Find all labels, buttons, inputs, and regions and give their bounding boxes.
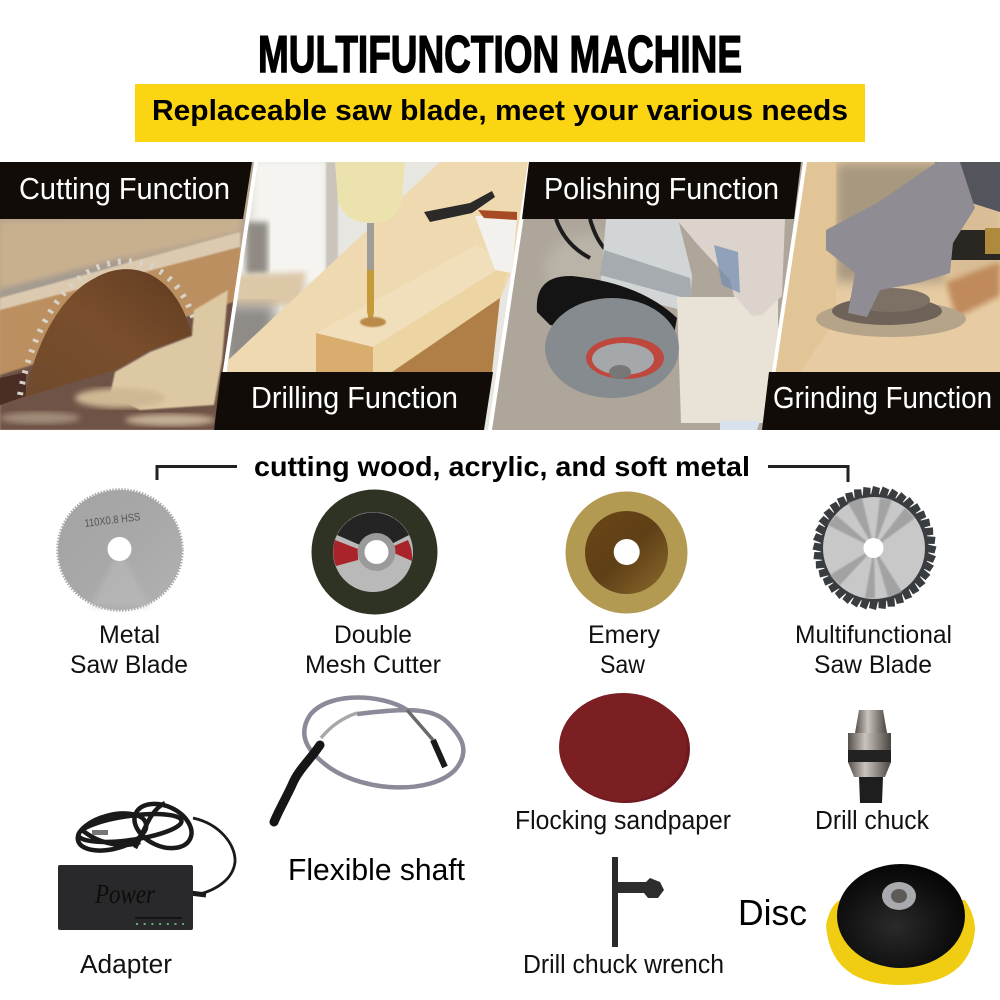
- label: drilling function: Drilling Function: [251, 380, 458, 415]
- icon: drill chuck wrench: [612, 857, 664, 947]
- drill: [335, 162, 405, 328]
- tile: [677, 297, 778, 423]
- glove: [676, 219, 785, 297]
- panel: drilling function: [214, 162, 528, 430]
- label: metal saw blade: Metal: [99, 621, 160, 649]
- label: drilling function: [214, 372, 493, 430]
- label: cutting function: [0, 162, 252, 219]
- label: drill chuck wrench: Drill chuck wrench: [523, 951, 724, 979]
- icon: drill chuck: [848, 710, 891, 803]
- grinder body: [600, 219, 692, 312]
- icon: emery saw: [566, 492, 688, 614]
- label: double: Double: [334, 621, 412, 649]
- label: emery: Emery: [588, 621, 660, 649]
- pliers: [424, 191, 517, 222]
- sleeve and tool: [935, 162, 1000, 260]
- label: polishing function: Polishing Function: [544, 171, 779, 206]
- label: polishing function: [522, 162, 801, 219]
- label: grinding function: [762, 372, 1000, 430]
- label: saw blade right: Saw Blade: [814, 651, 932, 679]
- title: MULTIFUNCTION MACHINE: [258, 26, 742, 84]
- label: cutting function: Cutting Function: [19, 171, 230, 206]
- icon: adapter: Power: [94, 879, 155, 909]
- icon: flocking sandpaper: [559, 693, 690, 803]
- label: disc: Disc: [738, 892, 807, 933]
- gloved hand: [826, 162, 975, 317]
- icon: flexible shaft: [274, 698, 463, 822]
- sander disc: [816, 288, 966, 337]
- label: adapter: Adapter: [80, 951, 173, 979]
- subtitle banner: Replaceable saw blade, meet your various needs: [152, 95, 848, 127]
- label: flocking sandpaper: Flocking sandpaper: [515, 807, 731, 835]
- subtitle banner: [135, 84, 865, 142]
- label: mesh cutter: Mesh Cutter: [305, 651, 441, 679]
- icon: double mesh cutter: [312, 490, 438, 614]
- icon: adapter: [58, 795, 235, 930]
- saw blade: [20, 261, 197, 397]
- icon: multifunctional saw blade: [802, 475, 947, 621]
- label: drill chuck: Drill chuck: [815, 807, 929, 835]
- sawdust: [110, 290, 228, 410]
- panel: cutting function: [0, 162, 254, 430]
- black guard: [536, 276, 677, 331]
- icon: disc: [826, 864, 975, 985]
- label: saw blade line 2: Saw Blade: [70, 651, 188, 679]
- icon: metal saw blade: 110X0.8 HSS: [84, 511, 141, 530]
- grinding wheel: [545, 298, 679, 398]
- bracket heading: cutting wood, acrylic, and soft metal: [254, 451, 750, 482]
- panel: polishing function: [492, 162, 803, 430]
- label: multifunctional: Multifunctional: [795, 621, 952, 649]
- label: flexible shaft: Flexible shaft: [288, 852, 465, 887]
- label: saw: Saw: [600, 651, 646, 679]
- icon: metal saw blade: [58, 490, 182, 610]
- panel: grinding function: [762, 162, 1000, 430]
